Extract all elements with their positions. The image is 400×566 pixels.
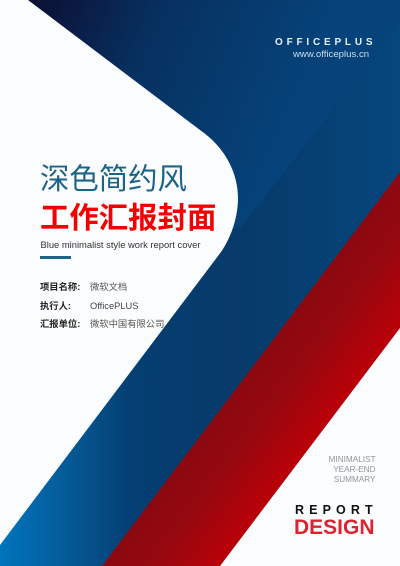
website: www.officeplus.cn <box>293 48 369 60</box>
red band <box>102 172 400 566</box>
row 3 label: 汇报单位: <box>40 318 80 328</box>
white panel left <box>0 0 238 545</box>
report label: REPORT <box>295 503 378 517</box>
minimalist summary: MINIMALIST <box>329 455 376 464</box>
brand name: OFFICEPLUS <box>275 36 376 48</box>
minimalist summary <box>329 455 376 484</box>
brand block <box>275 36 376 60</box>
english subtitle: Blue minimalist style work report cover <box>40 239 200 250</box>
row 3 value: 微软中国有限公司 <box>90 318 164 328</box>
title: 深色简约风 <box>40 163 187 196</box>
minimalist summary: SUMMARY <box>334 475 376 484</box>
row 1 value: 微软文档 <box>90 282 127 292</box>
minimalist summary: YEAR-END <box>333 465 376 474</box>
row 1 label: 项目名称: <box>40 282 80 292</box>
row 2 value: OfficePLUS <box>90 301 138 311</box>
accent line <box>40 256 71 258</box>
design label: DESIGN <box>294 516 375 538</box>
project info <box>40 282 164 328</box>
row 2 label: 执行人: <box>40 301 71 311</box>
white corner right <box>220 328 400 566</box>
subtitle red: 工作汇报封面 <box>40 202 216 235</box>
